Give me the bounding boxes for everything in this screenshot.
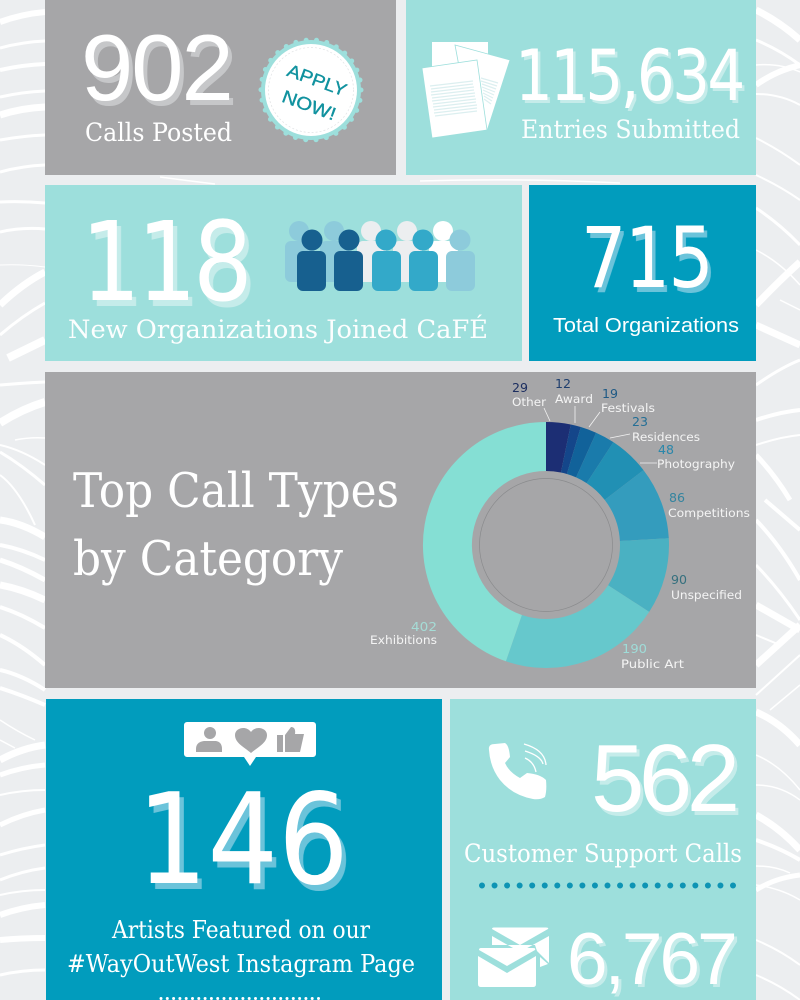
number: 118: 118 <box>81 199 249 327</box>
label: exhibitions 402 <box>370 620 437 647</box>
label: public art 190: 190 <box>622 642 647 656</box>
label: entries submitted: Entries Submitted <box>521 115 740 144</box>
label: residences 23: Residences <box>632 430 700 444</box>
text: artists featured <box>67 916 415 978</box>
label: public art 190: Public Art <box>621 657 685 671</box>
number: 115,634: 115,634 <box>515 36 743 117</box>
label: competitions 86: Competitions <box>668 506 750 520</box>
panel: new organizations <box>45 185 522 361</box>
panel: total organizations <box>529 185 756 361</box>
panel: calls posted <box>45 0 396 175</box>
text: artists featured: #WayOutWest Instagram Page <box>67 950 415 978</box>
label: competitions 86: 86 <box>669 491 685 505</box>
label: residences 23: 23 <box>632 415 648 429</box>
label: total organizations: Total Organizations <box>553 315 739 337</box>
heading: top call types by category: Top Call Types <box>73 463 399 519</box>
number: 6,767: 6,767 <box>567 919 735 1000</box>
label: photography 48 <box>657 443 735 471</box>
number: 902: 902 <box>81 15 232 120</box>
label: public art 190 <box>621 642 685 671</box>
label: new organizations joined: New Organizations Joined CaFÉ <box>68 315 488 344</box>
label: festivals 19: Festivals <box>601 401 655 415</box>
label: exhibitions 402: 402 <box>411 620 437 634</box>
number: 715: 715 <box>581 210 712 307</box>
label: calls posted: Calls Posted <box>85 118 232 147</box>
label: residences 23 <box>632 415 700 444</box>
donut chart <box>423 422 669 668</box>
panel: top call types <box>45 372 756 688</box>
label: award 12: 12 <box>555 377 571 391</box>
label: photography 48: Photography <box>657 457 735 471</box>
label: competitions 86 <box>668 491 750 520</box>
label: festivals 19 <box>601 387 655 415</box>
number: 146: 146 <box>137 766 349 913</box>
badge: apply now <box>261 40 361 140</box>
label: award 12: Award <box>555 392 593 406</box>
label: other 29 <box>512 381 546 409</box>
icon: documents <box>422 42 510 138</box>
label: unspecified 90: Unspecified <box>671 588 742 602</box>
icon: phone <box>489 743 546 799</box>
panel: entries submitted <box>406 0 756 175</box>
label: award 12 <box>555 377 593 406</box>
icon: social reactions bubble <box>184 722 316 766</box>
number: 562: 562 <box>591 725 736 832</box>
label: other 29: 29 <box>512 381 528 395</box>
icon: group of people <box>285 221 475 291</box>
badge: apply now: APPLY <box>285 60 350 100</box>
panel: instagram artists <box>46 699 442 1000</box>
label: exhibitions 402: Exhibitions <box>370 633 437 647</box>
panel: customer support <box>450 699 756 1000</box>
label: unspecified 90: 90 <box>671 573 687 587</box>
text: artists featured: Artists Featured on our <box>111 916 370 944</box>
label: festivals 19: 19 <box>602 387 618 401</box>
label: photography 48: 48 <box>658 443 674 457</box>
icon: envelopes <box>478 928 549 987</box>
heading: top call types by category <box>73 463 399 587</box>
label: other 29: Other <box>512 395 546 409</box>
label: customer support calls: Customer Support Calls <box>464 839 742 868</box>
heading: top call types by category: by Category <box>73 531 343 587</box>
label: unspecified 90 <box>671 573 742 602</box>
badge: apply now: NOW! <box>279 86 339 124</box>
